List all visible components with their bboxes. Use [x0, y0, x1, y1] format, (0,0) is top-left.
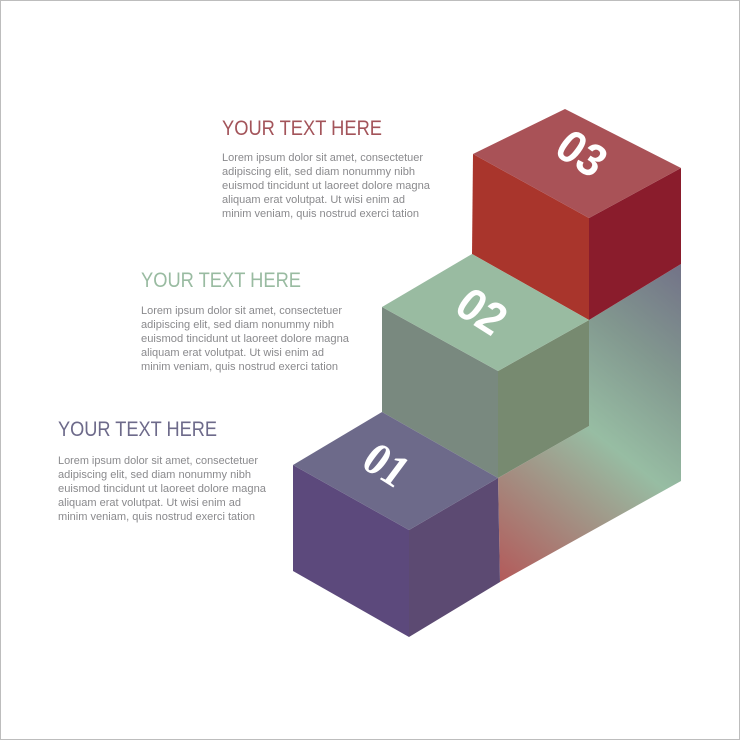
- heading 03: YOUR TEXT HERE: [222, 116, 382, 140]
- body 01: minim veniam, quis nostrud exerci tation: [58, 511, 255, 523]
- body 02: euismod tincidunt ut laoreet dolore magna: [141, 333, 350, 345]
- body 03: euismod tincidunt ut laoreet dolore magna: [222, 180, 431, 192]
- staircase back wall with gradient: [498, 264, 681, 582]
- body 02: Lorem ipsum dolor sit amet, consectetuer: [141, 305, 342, 317]
- body 01: aliquam erat volutpat. Ut wisi enim ad: [58, 497, 241, 509]
- step 01 left face: [293, 465, 409, 637]
- step 01 right face: [409, 478, 500, 637]
- step 03 right face: [589, 168, 681, 320]
- step 02 right face: [498, 320, 589, 478]
- body 03: minim veniam, quis nostrud exerci tation: [222, 208, 419, 220]
- text block 01: [58, 417, 267, 523]
- step 02 top face: [382, 254, 589, 371]
- body 01: adipiscing elit, sed diam nonummy nibh: [58, 469, 251, 481]
- body 01: euismod tincidunt ut laoreet dolore magna: [58, 483, 267, 495]
- step 02 left face: [382, 307, 498, 478]
- text block 03: [222, 116, 431, 220]
- body 02: [141, 305, 350, 373]
- step 03 top face: [473, 109, 681, 218]
- step 02 number: 02: [446, 279, 517, 345]
- step 03 number: 03: [546, 121, 617, 187]
- body 01: Lorem ipsum dolor sit amet, consectetuer: [58, 455, 258, 467]
- body 03: aliquam erat volutpat. Ut wisi enim ad: [222, 194, 405, 206]
- body 02: aliquam erat volutpat. Ut wisi enim ad: [141, 347, 324, 359]
- step 02 block: [382, 254, 589, 478]
- body 03: Lorem ipsum dolor sit amet, consectetuer: [222, 152, 423, 164]
- heading 02: YOUR TEXT HERE: [141, 268, 301, 292]
- body 03: adipiscing elit, sed diam nonummy nibh: [222, 166, 415, 178]
- step 03 block: [472, 109, 681, 320]
- text block 02: [141, 268, 350, 373]
- body 02: minim veniam, quis nostrud exerci tation: [141, 361, 338, 373]
- body 02: adipiscing elit, sed diam nonummy nibh: [141, 319, 334, 331]
- step 03 left face: [472, 154, 589, 320]
- step 01 block: [293, 412, 500, 637]
- step 01 top face: [293, 412, 498, 530]
- heading 01: YOUR TEXT HERE: [58, 417, 217, 441]
- body 01: [58, 455, 267, 523]
- step 01 number: 01: [353, 432, 420, 497]
- body 03: [222, 152, 431, 220]
